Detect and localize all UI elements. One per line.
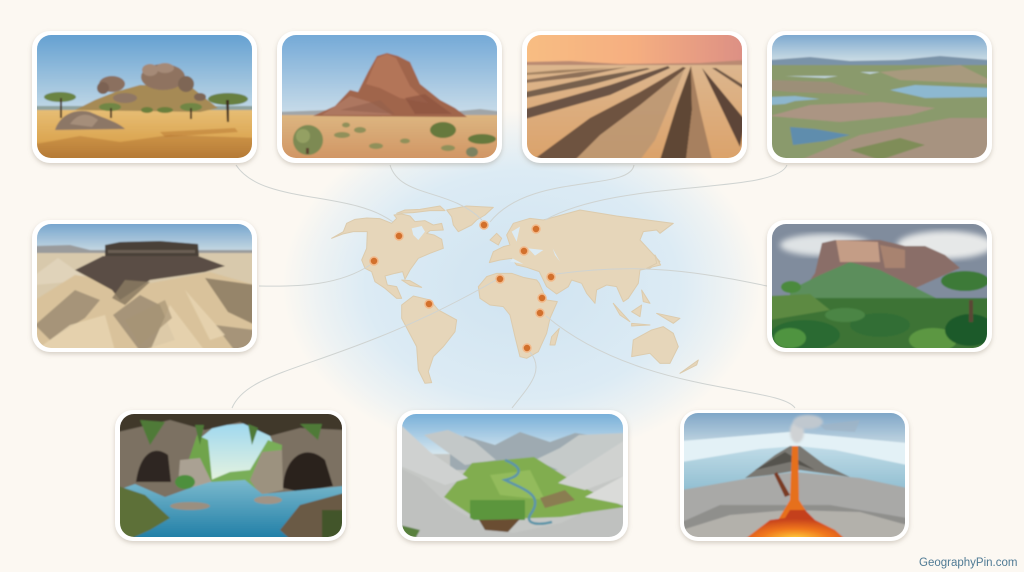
connector lines [232,165,795,408]
location dots [370,221,555,352]
card: flat-topped butte with badlands [32,220,257,352]
card: savanna inselberg [30,30,260,165]
card: red granite inselberg in desert [275,30,505,165]
card: tepui over rainforest [767,220,995,352]
world map with location markers [282,110,762,460]
continents [332,206,698,383]
card: tundra plateau with lakes [767,30,992,163]
card: glacial valley [397,410,628,541]
card: subglacial volcano cross-section [680,410,909,541]
watermark: GeographyPin.com [919,557,1017,569]
card: parallel eroded ridges at sunset [522,30,747,163]
card: river cave [115,410,346,541]
